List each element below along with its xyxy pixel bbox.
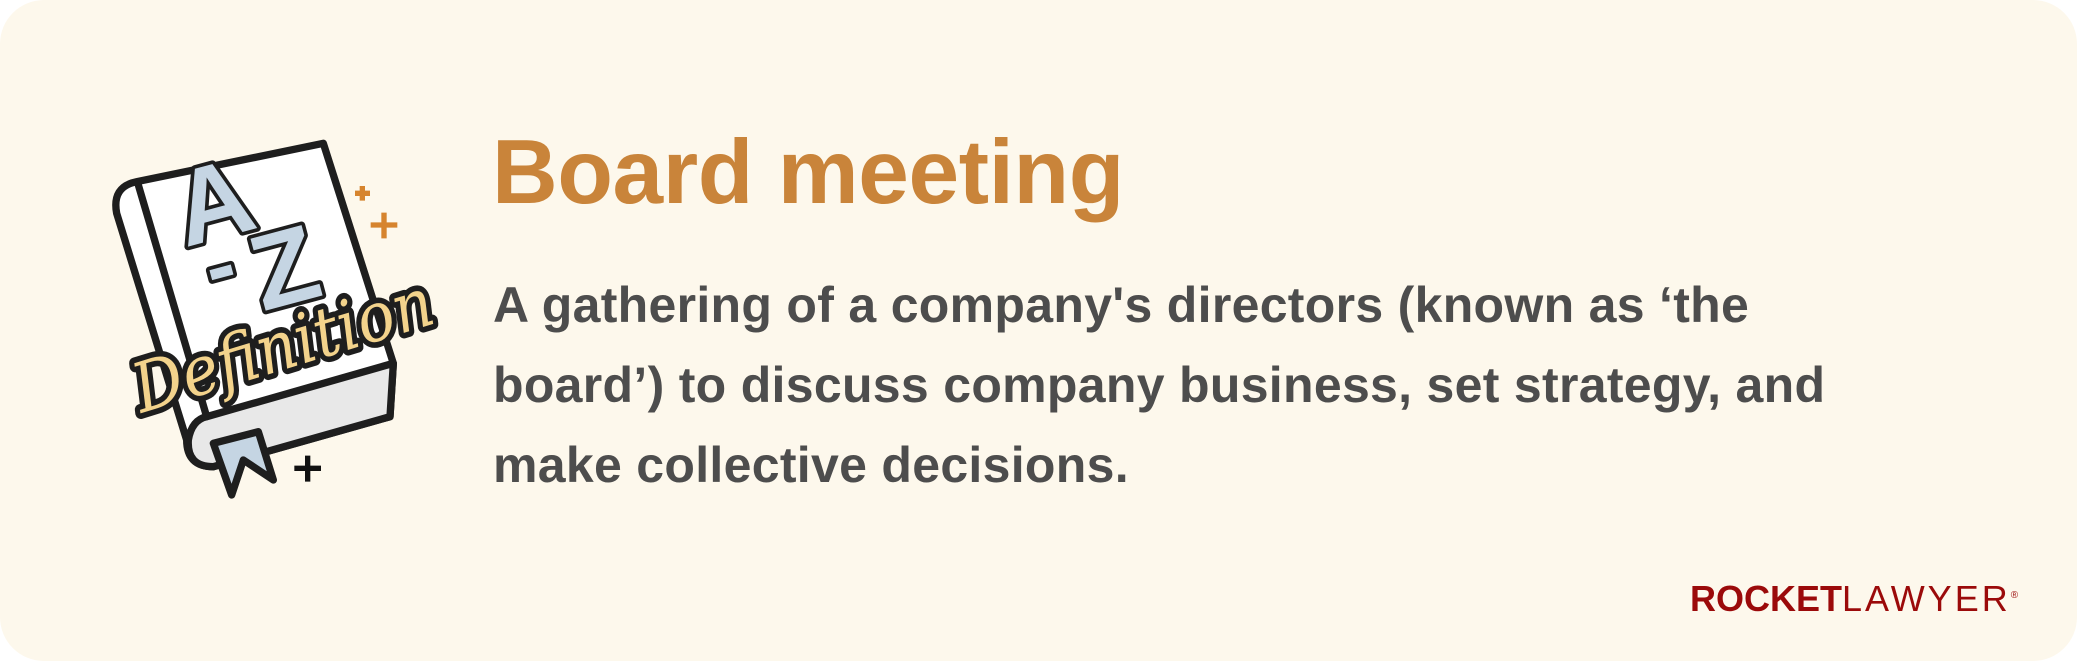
- logo: ROCKETLAWYER®: [1690, 578, 2018, 619]
- icon: A-Z definition book: Definition: [122, 263, 443, 430]
- icon: A-Z definition book: Z: [237, 201, 331, 334]
- icon: A-Z definition book: [112, 134, 443, 499]
- title: Board meeting: [492, 122, 1124, 223]
- icon: A-Z definition book: A: [160, 134, 266, 269]
- icon: A-Z definition book: -: [193, 216, 246, 316]
- definition text: A gathering of a company's directors (known as ‘the board’) to discuss company business, set strategy, and make collective decisions.: [493, 277, 1825, 493]
